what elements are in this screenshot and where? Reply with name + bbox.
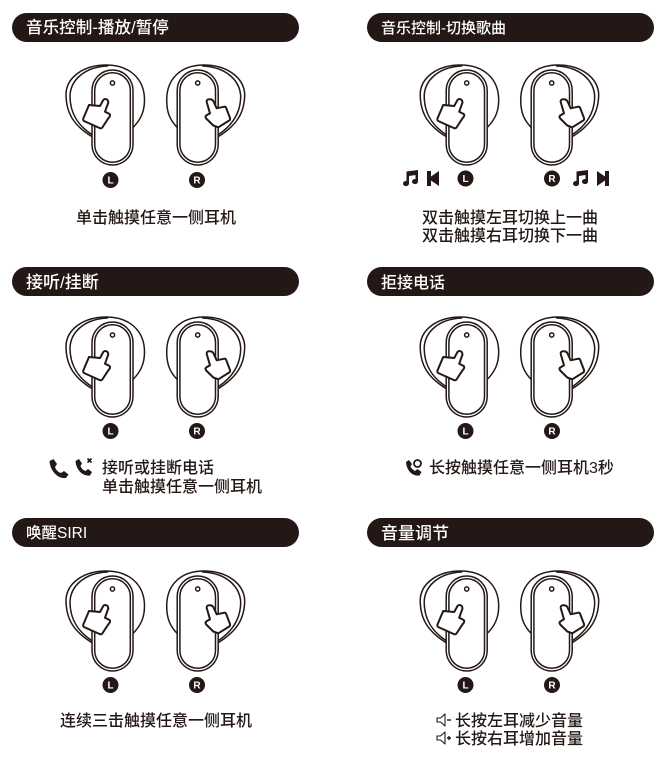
icon: left earbud with tap xyxy=(420,317,499,417)
panel: reject call xyxy=(367,267,654,477)
instruction text: 单击触摸任意一侧耳机 xyxy=(102,477,262,496)
badge: R: R xyxy=(193,176,201,187)
panel: play and pause xyxy=(12,13,299,227)
icon: right earbud with tap xyxy=(521,317,599,417)
badge: L xyxy=(458,170,474,186)
instruction text: 单击触摸任意一侧耳机 xyxy=(76,208,236,227)
badge: L: L xyxy=(107,427,114,438)
instruction text: 长按触摸任意一侧耳机3秒 xyxy=(429,458,614,477)
heading: play and pause xyxy=(12,13,299,42)
heading: switch songs: 音乐控制-切换歌曲 xyxy=(381,20,506,37)
panel: answer or hang up xyxy=(12,267,299,496)
heading: wake Siri xyxy=(12,518,299,547)
heading: switch songs xyxy=(367,13,654,42)
badge: R: R xyxy=(193,427,201,438)
heading: answer or hang up xyxy=(12,267,299,296)
icon: phone with clock xyxy=(406,460,422,476)
badge: R xyxy=(189,172,205,188)
icon: volume up xyxy=(437,732,451,744)
instruction text: 双击触摸左耳切换上一曲 xyxy=(422,209,598,227)
icon: music note left xyxy=(403,170,418,186)
icon: next track xyxy=(597,171,609,186)
instruction text xyxy=(102,459,262,496)
icon: right earbud with tap xyxy=(521,571,599,671)
heading: reject call: 拒接电话 xyxy=(381,274,445,292)
icon: previous track xyxy=(427,171,439,186)
badge: L xyxy=(458,423,474,439)
heading: volume: 音量调节 xyxy=(381,523,449,543)
badge: L: L xyxy=(462,427,469,438)
icon: phone answer xyxy=(50,459,68,478)
badge: L xyxy=(102,677,118,693)
icon: right earbud with tap xyxy=(167,65,245,165)
instruction text: 接听或挂断电话 xyxy=(102,459,214,477)
icon: left earbud with tap xyxy=(66,571,144,671)
icon: volume down xyxy=(437,714,451,726)
heading: play and pause: 音乐控制-播放/暂停 xyxy=(26,17,169,37)
badge: R xyxy=(189,677,205,693)
panel: volume xyxy=(367,518,654,748)
badge: R xyxy=(544,677,560,693)
heading: volume xyxy=(367,518,654,547)
badge: R: R xyxy=(548,174,556,185)
badge: R: R xyxy=(193,681,201,692)
badge: L xyxy=(458,677,474,693)
badge: L xyxy=(102,172,118,188)
instruction text: 连续三击触摸任意一侧耳机 xyxy=(60,711,252,730)
icon: left earbud with tap xyxy=(66,317,144,417)
icon: left earbud with tap xyxy=(420,571,499,671)
heading: wake Siri: 唤醒SIRI xyxy=(26,524,87,542)
badge: L: L xyxy=(462,174,469,185)
badge: R: R xyxy=(548,427,556,438)
instruction text: 长按左耳减少音量 xyxy=(455,711,583,730)
badge: L: L xyxy=(107,176,114,187)
icon: right earbud with tap xyxy=(167,317,245,417)
badge: R xyxy=(544,423,560,439)
heading: answer or hang up: 接听/挂断 xyxy=(26,273,99,292)
badge: R: R xyxy=(548,681,556,692)
badge: L: L xyxy=(107,681,114,692)
icon: right earbud with tap xyxy=(167,571,245,671)
icon: right earbud with tap xyxy=(521,65,599,165)
badge: L: L xyxy=(462,681,469,692)
icon: music note right xyxy=(573,170,588,186)
icon: left earbud with tap xyxy=(66,65,144,165)
instruction text xyxy=(455,711,583,748)
instruction text: 长按右耳增加音量 xyxy=(455,729,583,748)
icon: left earbud with tap xyxy=(420,65,499,165)
icon: phone hang up xyxy=(76,458,92,476)
badge: R xyxy=(544,170,560,186)
instruction text: 双击触摸右耳切换下一曲 xyxy=(422,227,598,245)
badge: R xyxy=(189,423,205,439)
panel: wake Siri xyxy=(12,518,299,730)
instruction text xyxy=(422,209,598,245)
panel: switch songs xyxy=(367,13,654,245)
heading: reject call xyxy=(367,267,654,296)
badge: L xyxy=(102,423,118,439)
